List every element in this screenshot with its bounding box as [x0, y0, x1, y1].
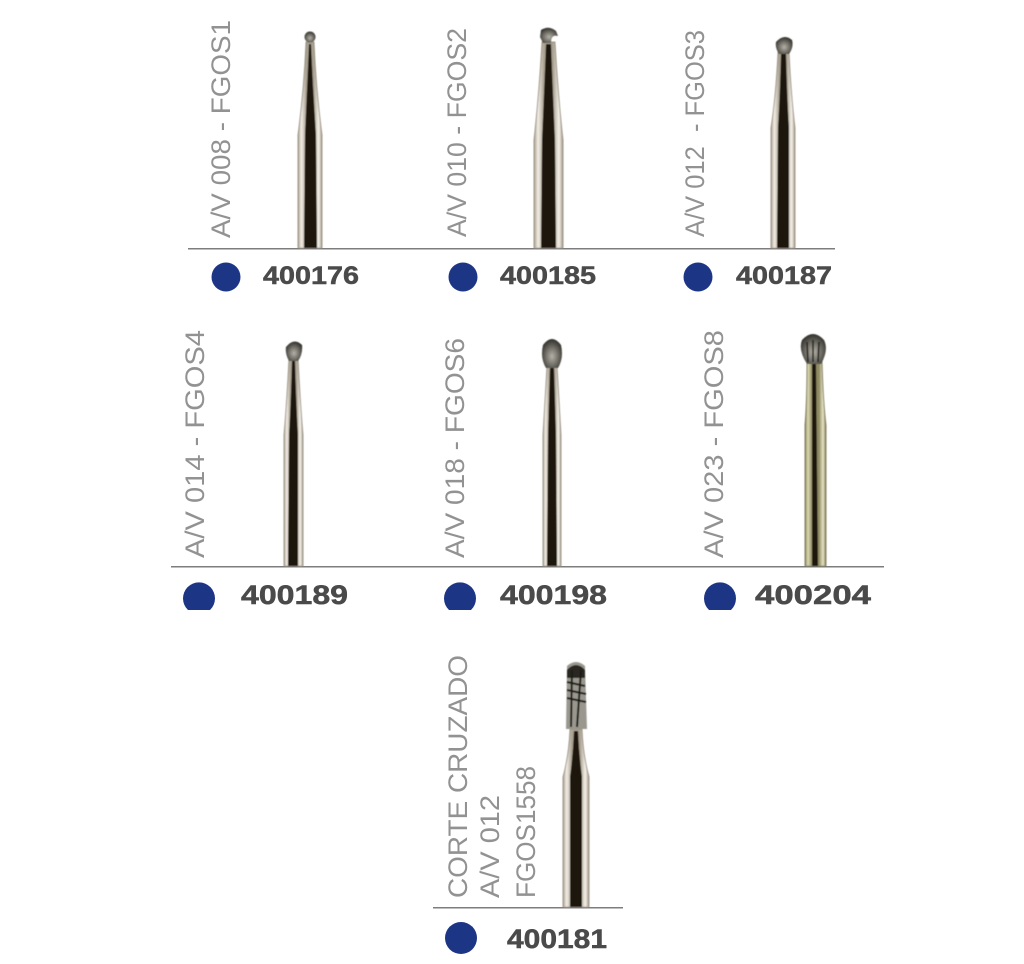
bur shank — [534, 42, 563, 248]
colour dot — [448, 262, 478, 292]
bur shank — [805, 360, 826, 566]
product 400189 — [183, 580, 348, 610]
bur shank — [771, 52, 795, 248]
shank core — [304, 44, 317, 248]
label: A/V 010 - FGOS2: A/V 010 - FGOS2 — [442, 28, 472, 237]
shank core — [777, 54, 789, 248]
baseline row 2 — [171, 566, 884, 568]
shank core — [812, 362, 818, 566]
code: 400189 — [241, 580, 348, 610]
bur 400198 — [542, 339, 562, 566]
label: A/V 012 - FGOS3: A/V 012 - FGOS3 — [680, 30, 710, 237]
label line 2: A/V 012 — [475, 795, 505, 898]
product 400181 — [445, 922, 607, 954]
code: 400185 — [500, 262, 596, 290]
bur 400189 — [284, 341, 303, 566]
product 400198 — [444, 580, 607, 610]
bur shank — [284, 358, 303, 566]
bur 400181 — [563, 662, 589, 907]
shank core — [541, 44, 556, 248]
baseline row 3 — [433, 907, 623, 908]
product 400185 — [448, 262, 596, 292]
code: 400181 — [507, 924, 607, 954]
colour dot — [704, 582, 736, 610]
bur shank — [543, 366, 561, 566]
bur 400176 — [298, 32, 322, 248]
label line 3: FGOS1558 — [511, 766, 541, 898]
product 400176 — [212, 262, 359, 292]
label: A/V 014 - FGOS4: A/V 014 - FGOS4 — [180, 330, 210, 558]
bur 400204 — [801, 334, 826, 566]
bur head — [801, 334, 826, 364]
bur shank — [563, 729, 589, 907]
code: 400176 — [263, 262, 359, 290]
head flutes — [807, 340, 819, 362]
bur head — [286, 341, 302, 361]
colour dot — [684, 262, 712, 292]
code: 400198 — [500, 580, 607, 610]
colour dot — [444, 582, 476, 610]
baseline row 1 — [188, 248, 835, 250]
bur shank — [298, 42, 322, 248]
bur 400185 — [534, 28, 563, 248]
product 400187 — [684, 262, 832, 292]
label: A/V 023 - FGOS8: A/V 023 - FGOS8 — [699, 330, 729, 558]
label: A/V 018 - FGOS6: A/V 018 - FGOS6 — [440, 338, 470, 558]
label: Corte Cruzado A/V 012 FGOS1558 — [443, 655, 541, 898]
product 400204 — [704, 580, 871, 610]
bur head — [304, 32, 316, 42]
bur 400187 — [771, 37, 795, 248]
bur head — [542, 339, 562, 368]
shank core — [570, 731, 582, 907]
label: A/V 008 - FGOS1: A/V 008 - FGOS1 — [206, 20, 236, 238]
bur head — [566, 662, 587, 729]
bur head — [776, 37, 793, 54]
shank core — [547, 368, 557, 566]
code: 400204 — [755, 580, 871, 610]
cross-cut flutes — [567, 665, 585, 678]
bur head — [540, 28, 558, 43]
colour dot — [183, 582, 215, 610]
label line 1: CORTE CRUZADO — [443, 655, 473, 898]
code: 400187 — [736, 262, 832, 290]
shank core — [288, 360, 298, 566]
colour dot — [445, 922, 477, 954]
colour dot — [212, 262, 240, 292]
